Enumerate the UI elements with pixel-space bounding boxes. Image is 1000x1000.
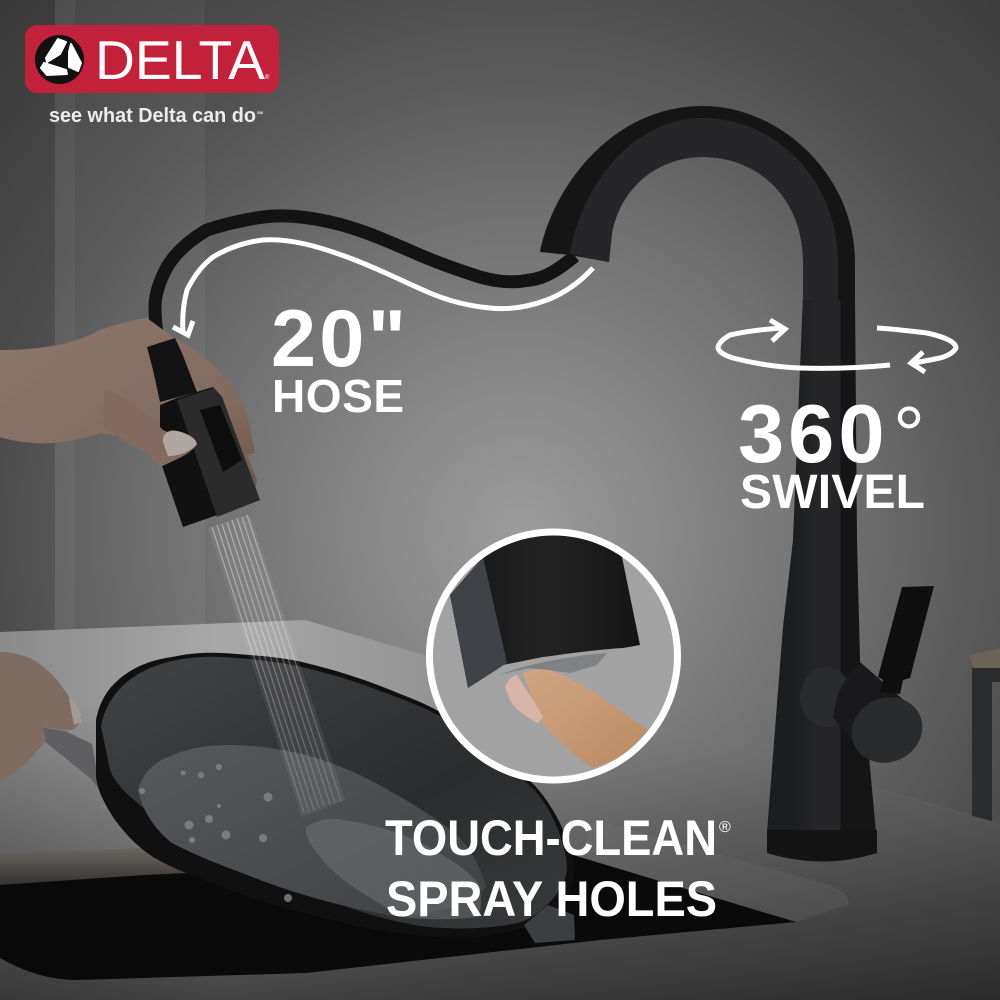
water droplets xyxy=(139,764,292,902)
water puddle xyxy=(306,819,481,919)
tagline service mark: SM xyxy=(257,110,264,115)
touch-clean label: ® xyxy=(719,819,731,836)
touch-clean label xyxy=(385,810,731,927)
right hand holding sprayer xyxy=(0,318,257,490)
pull-down hose xyxy=(155,216,575,340)
swivel arrows xyxy=(718,320,956,372)
sprayer neck xyxy=(147,338,197,402)
swivel label: 360 xyxy=(738,387,888,480)
swivel label: SWIVEL xyxy=(740,466,925,519)
hose length label: 20" xyxy=(271,294,406,384)
frying pan xyxy=(40,653,575,943)
inset backdrop xyxy=(430,532,678,780)
side table xyxy=(970,648,1000,821)
hose length label: HOSE xyxy=(272,370,404,422)
faucet body xyxy=(767,295,876,832)
sprayer side facet xyxy=(450,557,507,688)
swivel label xyxy=(738,387,929,519)
sink basin xyxy=(0,848,796,980)
logo badge xyxy=(25,25,279,93)
pan handle xyxy=(40,727,107,811)
sprayer button xyxy=(200,405,242,472)
sink rim xyxy=(573,820,849,922)
pan inner wall xyxy=(101,657,567,928)
handle rear hub xyxy=(800,667,852,727)
handle cylinder xyxy=(833,662,907,758)
fingernail xyxy=(505,675,543,723)
kitchen counter xyxy=(0,620,1000,1000)
pan cooking surface xyxy=(138,745,486,917)
touch-clean label: TOUCH-CLEAN xyxy=(385,810,717,866)
logo registered mark: ® xyxy=(265,74,270,81)
logo emblem xyxy=(35,35,84,84)
sprayer close-up xyxy=(450,520,640,688)
pan body xyxy=(96,653,575,937)
logo tagline: see what Delta can do xyxy=(49,105,256,127)
faucet xyxy=(540,106,934,862)
water spray xyxy=(208,514,345,817)
inset detail xyxy=(450,520,648,768)
fingertip xyxy=(523,669,648,768)
sprayer body xyxy=(160,387,260,527)
spout inner face xyxy=(570,118,838,300)
logo wordmark: DELTA xyxy=(95,29,265,91)
inset ring xyxy=(430,532,678,780)
touch-clean label: SPRAY HOLES xyxy=(386,871,717,927)
sprayer head xyxy=(103,338,260,527)
sprayer highlight xyxy=(177,388,260,517)
hose length arrow xyxy=(173,240,593,335)
handle lever xyxy=(878,586,934,694)
thumb nail xyxy=(163,430,197,456)
handle cap xyxy=(841,686,933,774)
left hand holding pan xyxy=(0,652,82,782)
inset: touch-clean spray holes xyxy=(430,520,678,780)
Delta logo xyxy=(25,25,279,127)
left hand fingernail xyxy=(69,698,82,725)
spray nozzles xyxy=(498,653,607,675)
faucet base xyxy=(767,830,877,862)
palm and fingers xyxy=(0,318,257,490)
swivel label: ° xyxy=(893,390,929,479)
splash off rim xyxy=(524,905,575,943)
thumb over sprayer xyxy=(103,390,197,467)
faucet spout xyxy=(540,106,855,300)
